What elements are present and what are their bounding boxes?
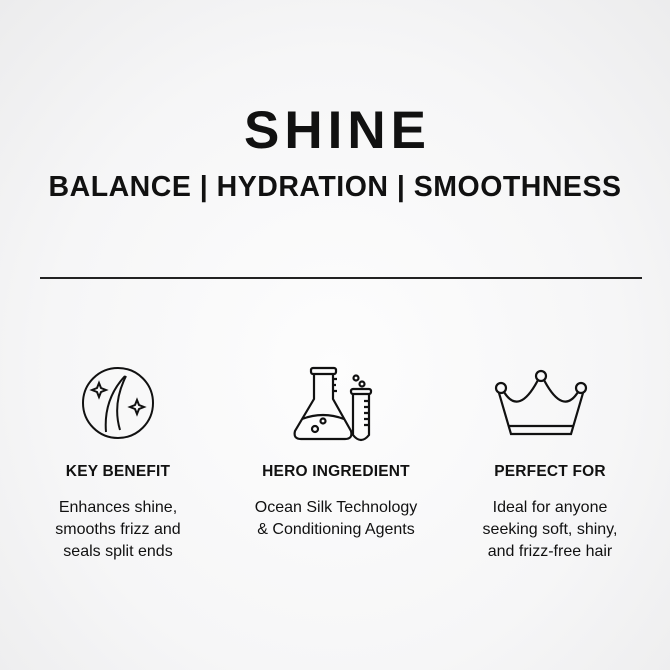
column 2: & Conditioning Agents: [257, 521, 415, 538]
column 3: Ideal for anyone: [493, 499, 607, 516]
icon: hair shine: [82, 367, 154, 439]
icon: flask: [294, 366, 372, 442]
column 1: seals split ends: [63, 543, 173, 560]
title: SHINE: [244, 101, 431, 160]
column 1: [55, 463, 181, 560]
subtitle: BALANCE | HYDRATION | SMOOTHNESS: [49, 171, 621, 203]
column 2: [255, 463, 418, 538]
column 2: Ocean Silk Technology: [255, 499, 417, 516]
icon: crown: [494, 370, 588, 436]
column 3: and frizz-free hair: [488, 543, 612, 560]
column 3: [483, 463, 617, 560]
column 1: KEY BENEFIT: [66, 463, 170, 480]
column 1: smooths frizz and: [55, 521, 181, 538]
column 3: seeking soft, shiny,: [483, 521, 617, 538]
column 3: PERFECT FOR: [494, 463, 606, 480]
column 2: HERO INGREDIENT: [262, 463, 410, 480]
column 1: Enhances shine,: [59, 499, 177, 516]
